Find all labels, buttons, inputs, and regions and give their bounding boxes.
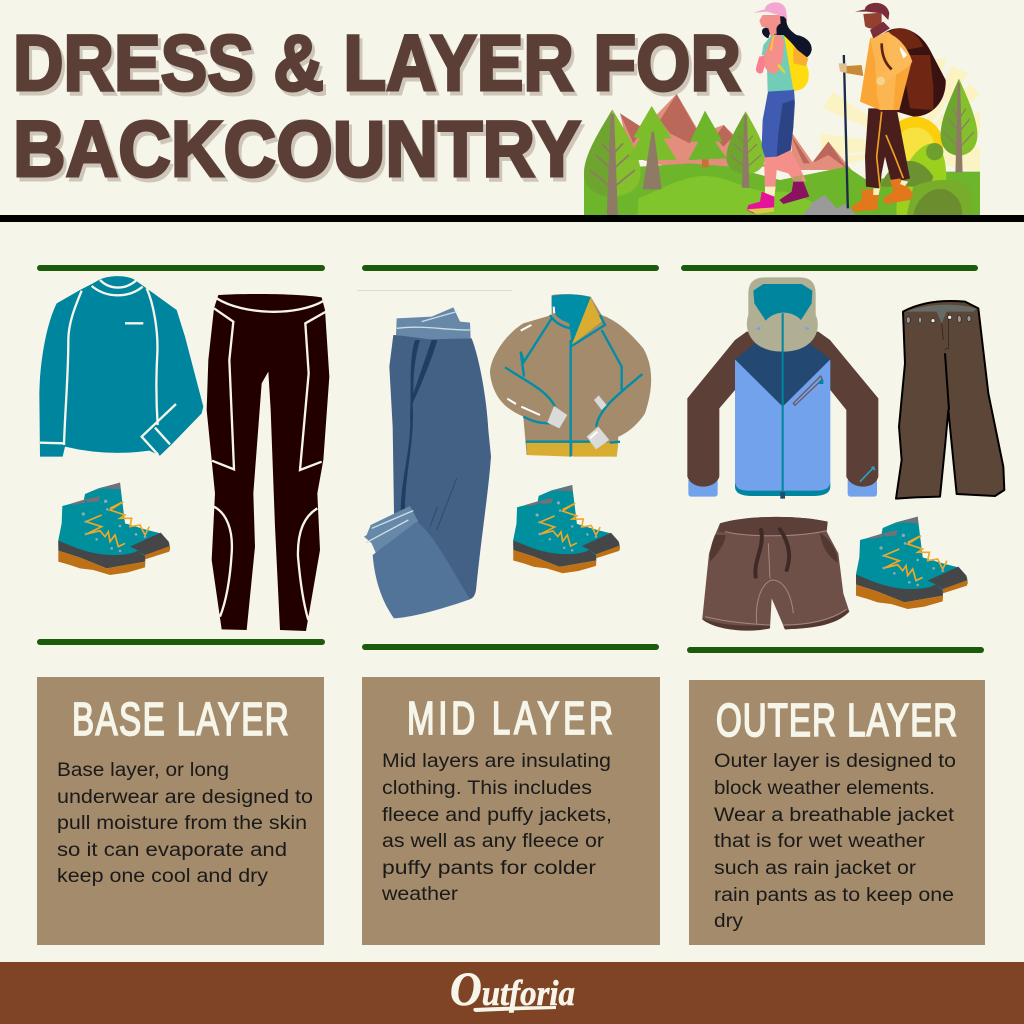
heading: mid layer: MID LAYER xyxy=(407,694,613,744)
text: outer layer description: Outer layer is designed to xyxy=(714,751,956,772)
heading: base layer: BASE LAYER xyxy=(72,695,289,745)
title: BACKCOUNTRY xyxy=(13,104,581,193)
woman hiker xyxy=(747,2,812,214)
text: base layer description: keep one cool and dry xyxy=(57,866,269,887)
text: base layer description: underwear are designed to xyxy=(57,787,313,808)
green rule: mid bottom xyxy=(362,644,659,650)
icon: tan fleece jacket xyxy=(490,294,651,457)
heading: outer layer: OUTER LAYER xyxy=(716,696,957,746)
trekking pole xyxy=(843,55,849,208)
logo: Outforia: Outforia xyxy=(450,963,575,1016)
black divider line xyxy=(0,215,1024,222)
title: DRESS & LAYER FOR xyxy=(13,18,741,107)
text: outer layer description: Wear a breathable jacket xyxy=(714,805,955,826)
green rule: outer bottom xyxy=(687,647,984,653)
panel: base layer clothing xyxy=(37,265,329,645)
green rule: mid top xyxy=(362,265,659,271)
footer band xyxy=(0,962,1024,1024)
title: DRESS & LAYER FOR xyxy=(16,22,744,111)
icon: hiking boots xyxy=(513,485,620,573)
green rule: outer top xyxy=(681,265,978,271)
text: outer layer description: that is for wet weather xyxy=(714,831,926,852)
sun and rays xyxy=(821,58,980,173)
text: base layer description: pull moisture from the skin xyxy=(57,813,307,834)
icon: black leggings xyxy=(207,294,329,631)
mountains xyxy=(620,94,852,170)
panel: outer layer description xyxy=(689,680,985,945)
text: base layer description: Base layer, or long xyxy=(57,760,229,781)
icon: rain jacket xyxy=(687,277,878,499)
icon: brown shorts xyxy=(702,517,849,631)
green rule: base bottom xyxy=(37,639,325,645)
illustration: hikers in landscape xyxy=(584,2,980,215)
icon: hiking boots xyxy=(58,483,170,575)
title xyxy=(13,18,744,197)
text: outer layer description: rain pants as to keep one xyxy=(714,885,954,906)
text: outer layer description: block weather elements. xyxy=(714,778,935,799)
text: outer layer description: such as rain jacket or xyxy=(714,858,917,879)
text: mid layer description: fleece and puffy jackets, xyxy=(382,805,612,826)
panel: mid layer description xyxy=(362,677,660,945)
text: outer layer description: dry xyxy=(714,911,744,932)
text: base layer description: so it can evaporate and xyxy=(57,840,287,861)
panel: base layer description xyxy=(37,677,324,945)
text: mid layer description: as well as any fleece or xyxy=(382,831,605,852)
title: BACKCOUNTRY xyxy=(16,108,584,197)
ground hills xyxy=(584,143,980,215)
text: mid layer description: Mid layers are insulating xyxy=(382,751,611,772)
icon: hiking boots xyxy=(856,517,968,609)
rock xyxy=(803,195,857,215)
man hiker xyxy=(839,3,946,212)
panel: outer layer clothing xyxy=(681,265,1004,653)
icon: blue fleece pants xyxy=(364,307,491,618)
panel: mid layer clothing xyxy=(357,265,659,650)
thin grey line xyxy=(357,290,512,291)
icon: teal long sleeve shirt xyxy=(39,276,203,457)
text: mid layer description: clothing. This includes xyxy=(382,778,592,799)
text: mid layer description: puffy pants for colder xyxy=(382,858,597,879)
green rule: base top xyxy=(37,265,325,271)
trees xyxy=(584,79,977,215)
text: mid layer description: weather xyxy=(381,884,459,905)
icon: brown rain pants xyxy=(896,301,1004,499)
